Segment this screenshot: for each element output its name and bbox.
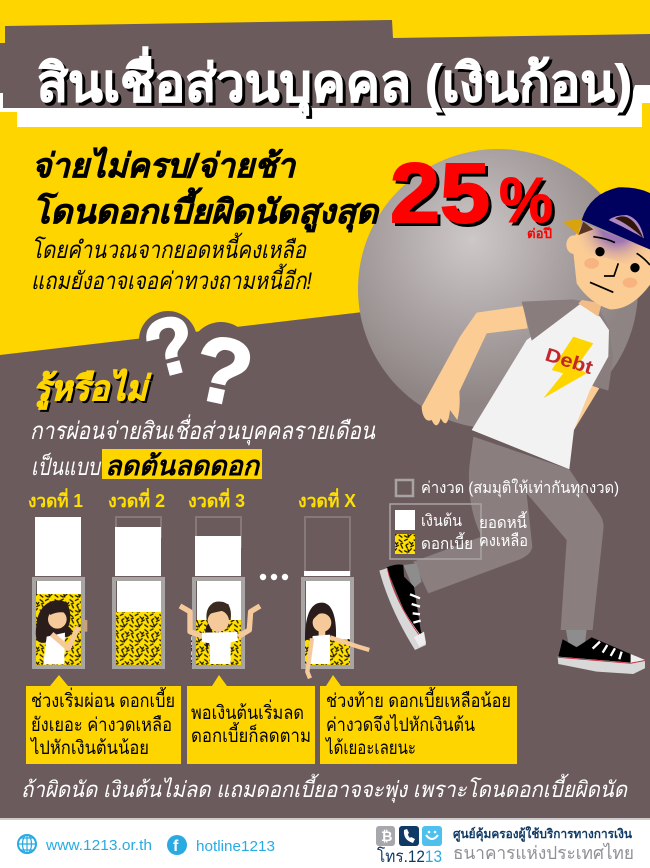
legend: ดอกเบี้ย xyxy=(421,532,473,553)
organization name: ศูนย์คุ้มครองผู้ใช้บริการทางการเงิน xyxy=(453,826,632,842)
rate 25%: % xyxy=(499,164,553,236)
trousers xyxy=(413,437,604,630)
rate 25%: % xyxy=(502,167,556,239)
title: สินเชื่อส่วนบุคคล (เงินก้อน) xyxy=(40,50,635,119)
callout 3: ได้เยอะเลยนะ xyxy=(324,737,416,759)
explanation: การผ่อนจ่ายสินเชื่อส่วนบุคคลรายเดือน xyxy=(30,414,376,446)
warning detail xyxy=(31,232,312,295)
callout 1: ไปหักเงินต้นน้อย xyxy=(29,737,149,759)
debt ball xyxy=(358,149,638,429)
man xyxy=(379,187,650,674)
upper body xyxy=(422,187,650,469)
highlight: reducing balance: ลดต้นลดดอก xyxy=(105,451,261,481)
did you know heading: รู้หรือไม่ xyxy=(35,370,154,412)
rate 25%: 25 xyxy=(390,146,490,240)
facebook xyxy=(167,835,275,855)
warning headline: โดนดอกเบี้ยผิดนัดสูงสุด xyxy=(32,187,381,233)
column: installment 3 xyxy=(180,517,260,667)
front shoe xyxy=(558,630,645,674)
callout 1 xyxy=(26,675,181,764)
title: สินเชื่อส่วนบุคคล (เงินก้อน) xyxy=(37,47,632,116)
1213 logo: ₿ xyxy=(381,828,392,844)
callout 1: ยังเยอะ ค่างวดเหลือ xyxy=(31,715,172,736)
ellipsis dots xyxy=(260,574,288,580)
installment labels: งวดที่ 2 xyxy=(108,488,165,511)
facebook: f xyxy=(173,838,179,855)
warning headline xyxy=(32,146,381,233)
rate 25% xyxy=(390,146,556,243)
callout 3: ช่วงท้าย ดอกเบี้ยเหลือน้อย xyxy=(326,687,511,712)
callout 2: ดอกเบี้ยก็ลดตาม xyxy=(191,722,311,747)
girl 3 xyxy=(180,602,260,664)
legend xyxy=(390,478,619,559)
explanation: เป็นแบบ xyxy=(31,452,101,481)
facebook: hotline1213 xyxy=(196,838,275,855)
callout 3 xyxy=(320,675,517,764)
organization name xyxy=(453,826,634,863)
rate 25%: ต่อปี xyxy=(527,226,552,241)
girl 1 xyxy=(36,600,87,664)
legend: ค่างวด (สมมุติให้เท่ากันทุกงวด) xyxy=(421,478,619,498)
warning headline: จ่ายไม่ครบ/จ่ายช้า xyxy=(32,146,296,184)
callout 2 xyxy=(187,675,315,764)
column: installment 2 xyxy=(114,517,163,667)
question marks: ? xyxy=(135,297,206,395)
installment labels xyxy=(28,488,356,511)
1213 logo xyxy=(376,826,442,866)
website xyxy=(18,835,152,854)
warning detail: แถมยังอาจเจอค่าทวงถามหนี้อีก! xyxy=(31,263,312,295)
callout 1: ช่วงเริ่มผ่อน ดอกเบี้ย xyxy=(31,687,175,712)
shirt text: Debt xyxy=(543,345,596,379)
explanation xyxy=(30,414,376,481)
legend: ยอดหนี้ xyxy=(479,511,527,532)
installment labels: งวดที่ 3 xyxy=(188,488,245,511)
warning detail: โดยคำนวณจากยอดหนี้คงเหลือ xyxy=(31,232,307,264)
organization name: ธนาคารแห่งประเทศไทย xyxy=(453,842,634,863)
installment labels: งวดที่ X xyxy=(298,488,356,511)
column: installment X xyxy=(303,517,369,678)
legend: คงเหลือ xyxy=(479,532,528,550)
back shoe xyxy=(379,563,426,650)
girl X xyxy=(305,603,369,678)
installment labels: งวดที่ 1 xyxy=(28,488,83,511)
legend: เงินต้น xyxy=(421,512,462,530)
did you know heading: รู้หรือไม่ xyxy=(33,368,152,410)
footer xyxy=(0,818,650,868)
1213 logo: โทร.1213 xyxy=(377,846,442,866)
question marks xyxy=(135,297,261,427)
website: www.1213.or.th xyxy=(45,837,152,854)
title banner xyxy=(0,20,650,127)
callout 2: พอเงินต้นเริ่มลด xyxy=(191,699,304,724)
callout 3: ค่างวดจึงไปหักเงินต้น xyxy=(326,714,475,736)
column: installment 1 xyxy=(34,517,87,667)
rate 25%: 25 xyxy=(393,149,493,243)
question marks: ? xyxy=(185,316,261,427)
head xyxy=(563,187,650,309)
lightning bolt xyxy=(543,337,593,398)
